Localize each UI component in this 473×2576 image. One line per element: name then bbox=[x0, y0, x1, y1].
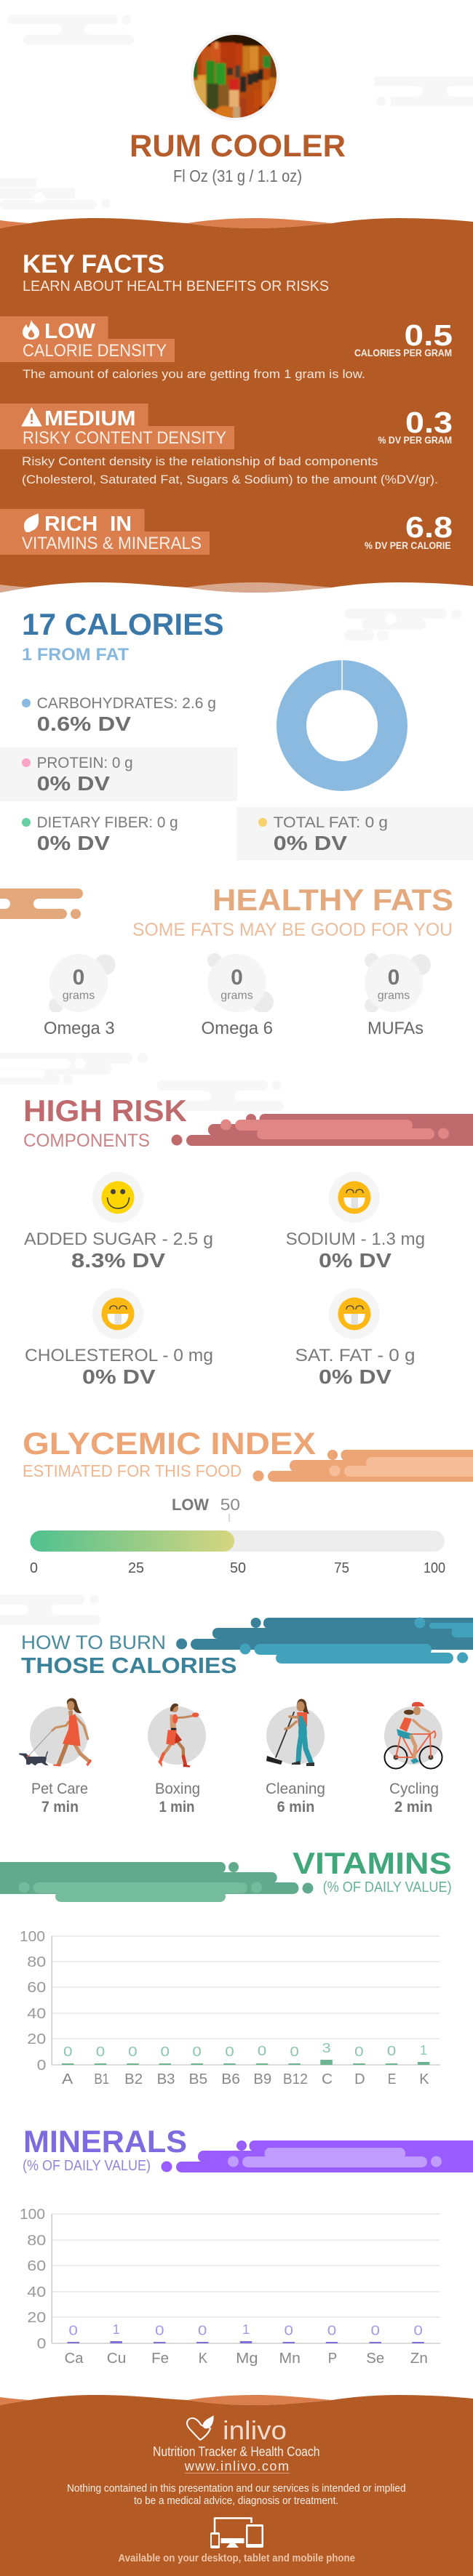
unit: CALORIES PER GRAM bbox=[354, 348, 452, 358]
calories heading: 17 CALORIES bbox=[22, 607, 224, 641]
panel: healthy fats bbox=[0, 883, 453, 1038]
activity: cycling: 2 min bbox=[394, 1799, 432, 1815]
item: saturated fat: 0% DV bbox=[319, 1365, 391, 1388]
unit: % DV PER GRAM bbox=[378, 435, 452, 446]
bar chart: minerals: Ca bbox=[65, 2351, 84, 2367]
icon: person sweeping bbox=[266, 1699, 314, 1766]
item: cholesterol: CHOLESTEROL - 0 mg bbox=[25, 1346, 213, 1365]
panel: calories and macronutrients bbox=[0, 607, 473, 860]
bar chart: vitamins: 0 bbox=[63, 2044, 73, 2059]
activity: cleaning: 6 min bbox=[277, 1799, 314, 1815]
decorative blob bbox=[253, 1450, 473, 1482]
row: carbohydrates: 0.6% DV bbox=[37, 713, 131, 735]
background cloud: burn calories bbox=[0, 1594, 109, 1625]
vitamins and minerals label: VITAMINS & MINERALS bbox=[22, 534, 202, 553]
donut chart bbox=[291, 659, 393, 777]
icon: warning triangle bbox=[22, 408, 41, 426]
fat: omega 3: 0 bbox=[73, 966, 84, 990]
row: protein bbox=[0, 747, 237, 801]
activity: cycling: Cycling bbox=[389, 1781, 439, 1797]
row: carbohydrates bbox=[22, 695, 216, 735]
fat: omega 3 bbox=[44, 954, 115, 1038]
activity: pet care: 7 min bbox=[41, 1799, 79, 1815]
icon: flame bbox=[23, 320, 39, 340]
fat: mufas bbox=[365, 953, 431, 1038]
bar chart: vitamins: 40 bbox=[27, 2006, 46, 2022]
gauge scale: 0 bbox=[30, 1560, 38, 1576]
logo: inlivo: inlivo bbox=[223, 2415, 287, 2445]
subheading: (% OF DAILY VALUE) bbox=[323, 1879, 452, 1895]
website link: www.inlivo.com bbox=[184, 2459, 289, 2473]
bar chart: vitamins: 0 bbox=[290, 2044, 299, 2059]
gauge scale: 100 bbox=[424, 1560, 445, 1576]
activity: pet care: Pet Care bbox=[31, 1781, 88, 1797]
panel: glycemic index bbox=[23, 1427, 473, 1576]
icon: cyclist bbox=[384, 1702, 442, 1768]
subheading: SOME FATS MAY BE GOOD FOR YOU bbox=[132, 920, 453, 940]
value: 0.3 bbox=[405, 406, 453, 439]
disclaimer line one: Nothing contained in this presentation and our services is intended or implied bbox=[67, 2482, 406, 2495]
bar chart: vitamins: 0 bbox=[128, 2044, 138, 2059]
bar chart: vitamins: 80 bbox=[27, 1954, 46, 1970]
bar chart: minerals: Se bbox=[366, 2351, 384, 2367]
fat: mufas: 0 bbox=[388, 966, 400, 990]
description: The amount of calories you are getting from 1 gram is low. bbox=[23, 367, 365, 381]
decorative blob bbox=[0, 888, 92, 919]
bar chart: vitamins bbox=[20, 1929, 440, 2087]
logo: inlivo bbox=[187, 2415, 287, 2445]
row: dietary fiber: 0% DV bbox=[37, 832, 110, 854]
icon: grinning face bbox=[102, 1297, 134, 1331]
bar chart: vitamins: B6 bbox=[221, 2071, 240, 2087]
panel: footer bbox=[0, 2395, 473, 2576]
decorative blob bbox=[0, 1862, 313, 1902]
description: Risky Content density is the relationship of bad components bbox=[22, 454, 378, 468]
rich in label: RICH IN bbox=[44, 513, 132, 536]
icon: grinning face bbox=[338, 1297, 371, 1331]
value: 6.8 bbox=[405, 510, 453, 544]
decorative blob bbox=[176, 1617, 473, 1664]
key facts subheading: LEARN ABOUT HEALTH BENEFITS OR RISKS bbox=[23, 278, 329, 294]
bar chart: minerals: P bbox=[328, 2351, 337, 2367]
bar chart: vitamins: 0 bbox=[354, 2044, 364, 2059]
item: sodium: SODIUM - 1.3 mg bbox=[286, 1229, 425, 1249]
heading: VITAMINS bbox=[293, 1846, 452, 1880]
panel: key facts bbox=[0, 215, 473, 601]
panel: minerals bbox=[20, 2124, 473, 2367]
disclaimer line two: to be a medical advice, diagnosis or treatment. bbox=[134, 2495, 338, 2507]
background clouds: header bbox=[0, 15, 473, 209]
risky content density label: RISKY CONTENT DENSITY bbox=[23, 428, 226, 448]
bar chart: minerals: 40 bbox=[27, 2284, 46, 2300]
icon: grinning face bbox=[338, 1181, 371, 1214]
bar chart: vitamins: E bbox=[388, 2071, 396, 2087]
bar chart: minerals: 1 bbox=[242, 2322, 250, 2337]
bottom wave bbox=[0, 582, 473, 601]
activity: boxing bbox=[148, 1704, 206, 1815]
food photo: rum bottles bbox=[191, 32, 279, 121]
panel: vitamins bbox=[0, 1846, 452, 2087]
row: total fat bbox=[236, 807, 473, 860]
fat: mufas: MUFAs bbox=[367, 1019, 424, 1038]
fact: rich in vitamins and minerals bbox=[0, 509, 453, 555]
item: saturated fat bbox=[295, 1288, 415, 1388]
bar chart: minerals: 20 bbox=[27, 2310, 46, 2326]
bar chart: minerals: Mg bbox=[236, 2351, 258, 2367]
bar chart: vitamins: K bbox=[419, 2071, 429, 2087]
bar chart: vitamins: A bbox=[62, 2071, 73, 2087]
activity: cleaning: Cleaning bbox=[266, 1781, 325, 1797]
bar chart: minerals bbox=[20, 2207, 440, 2367]
item: sodium: 0% DV bbox=[319, 1249, 391, 1272]
bar chart: vitamins: 0 bbox=[37, 2058, 46, 2074]
heading: HIGH RISK bbox=[23, 1094, 187, 1128]
subheading: COMPONENTS bbox=[23, 1131, 150, 1151]
bar chart: vitamins: 3 bbox=[322, 2040, 331, 2055]
bar chart: vitamins: 0 bbox=[387, 2043, 396, 2058]
bar chart: minerals: Zn bbox=[410, 2351, 428, 2367]
bar chart: vitamins: D bbox=[354, 2071, 365, 2087]
activity: pet care bbox=[19, 1698, 92, 1815]
bar chart: vitamins: 0 bbox=[192, 2044, 202, 2059]
activity: boxing: 1 min bbox=[159, 1799, 195, 1815]
subheading: (% OF DAILY VALUE) bbox=[23, 2158, 151, 2174]
row: dietary fiber: DIETARY FIBER: 0 g bbox=[37, 814, 178, 831]
gauge scale: 50 bbox=[230, 1560, 246, 1576]
gauge scale: 25 bbox=[128, 1560, 144, 1576]
row: carbohydrates: CARBOHYDRATES: 2.6 g bbox=[37, 695, 216, 712]
bar chart: vitamins: B3 bbox=[157, 2071, 175, 2087]
bar chart: minerals: Cu bbox=[107, 2351, 126, 2367]
row: dietary fiber bbox=[22, 814, 178, 854]
bar chart: minerals: Mn bbox=[279, 2351, 301, 2367]
row: total fat: 0% DV bbox=[274, 832, 347, 854]
unit: % DV PER CALORIE bbox=[365, 540, 451, 551]
fat: omega 6: 0 bbox=[231, 966, 243, 990]
gauge scale bbox=[30, 1560, 445, 1576]
bar chart: vitamins: B9 bbox=[253, 2071, 271, 2087]
bar chart: vitamins: 20 bbox=[27, 2031, 46, 2047]
activity: cleaning bbox=[266, 1699, 325, 1815]
bar chart: vitamins: B12 bbox=[283, 2071, 308, 2087]
calorie density label: CALORIE DENSITY bbox=[23, 341, 167, 361]
heading line two: THOSE CALORIES bbox=[21, 1653, 237, 1678]
fat: mufas: grams bbox=[378, 990, 410, 1002]
bar chart: minerals: 0 bbox=[327, 2322, 336, 2338]
item: added sugar: 8.3% DV bbox=[71, 1249, 165, 1272]
bar chart: minerals: 0 bbox=[68, 2322, 78, 2338]
gauge label bbox=[172, 1496, 240, 1522]
bar chart: vitamins: 0 bbox=[225, 2044, 234, 2059]
bar chart: vitamins: 0 bbox=[258, 2043, 266, 2058]
fat: omega 6: Omega 6 bbox=[201, 1019, 273, 1038]
gauge scale: 75 bbox=[334, 1560, 349, 1576]
tagline: Nutrition Tracker & Health Coach bbox=[153, 2444, 320, 2459]
calories from fat: 1 FROM FAT bbox=[22, 645, 129, 665]
description line two: (Cholesterol, Saturated Fat, Sugars & Sodium) to the amount (%DV/gr). bbox=[22, 473, 438, 486]
heading: MINERALS bbox=[23, 2124, 187, 2159]
bar chart: minerals: Fe bbox=[151, 2351, 169, 2367]
icon: boxer bbox=[158, 1704, 199, 1768]
availability note: Available on your desktop, tablet and mobile phone bbox=[118, 2552, 355, 2564]
heading line one: HOW TO BURN bbox=[21, 1632, 166, 1653]
activity: cycling bbox=[384, 1702, 442, 1815]
item: sodium bbox=[286, 1172, 425, 1272]
key facts heading: KEY FACTS bbox=[23, 250, 164, 278]
subheading: ESTIMATED FOR THIS FOOD bbox=[23, 1461, 242, 1480]
bar chart: vitamins: B2 bbox=[124, 2071, 143, 2087]
background cloud: calories bbox=[344, 609, 461, 641]
bar chart: minerals: 100 bbox=[20, 2207, 45, 2223]
bar chart: minerals: 0 bbox=[37, 2336, 46, 2352]
row: protein: 0% DV bbox=[37, 772, 110, 795]
heading: GLYCEMIC INDEX bbox=[23, 1427, 316, 1461]
gauge label: LOW bbox=[172, 1496, 209, 1514]
low label: LOW bbox=[44, 320, 96, 343]
item: added sugar: ADDED SUGAR - 2.5 g bbox=[24, 1229, 213, 1249]
bar chart: vitamins: 1 bbox=[420, 2042, 427, 2058]
background clouds: high risk bbox=[0, 1053, 288, 1111]
fat: omega 6 bbox=[201, 953, 274, 1038]
decorative blob bbox=[162, 2140, 473, 2172]
bar chart: vitamins: 0 bbox=[96, 2044, 105, 2059]
icon: woman walking dog bbox=[19, 1698, 92, 1766]
panel: how to burn those calories bbox=[19, 1617, 473, 1815]
bar chart: vitamins: C bbox=[322, 2071, 333, 2087]
fact: low calorie density bbox=[0, 316, 453, 381]
bar chart: minerals: 0 bbox=[198, 2322, 207, 2338]
gauge bar bbox=[31, 1530, 445, 1552]
serving size: Fl Oz (31 g / 1.1 oz) bbox=[173, 166, 302, 185]
bar chart: minerals: 80 bbox=[27, 2233, 46, 2249]
row: total fat: TOTAL FAT: 0 g bbox=[274, 814, 388, 831]
activity: boxing: Boxing bbox=[155, 1781, 200, 1797]
bar chart: vitamins: 0 bbox=[161, 2044, 170, 2059]
medium label: MEDIUM bbox=[44, 407, 136, 430]
fact: medium risky content density bbox=[0, 404, 453, 486]
decorative blob bbox=[172, 1114, 473, 1146]
item: cholesterol: 0% DV bbox=[82, 1365, 156, 1388]
fat: omega 6: grams bbox=[220, 990, 253, 1002]
fat: omega 3: grams bbox=[63, 990, 95, 1002]
bar chart: vitamins: B1 bbox=[94, 2071, 109, 2087]
item: cholesterol bbox=[25, 1288, 213, 1388]
item: added sugar bbox=[24, 1172, 213, 1272]
bar chart: minerals: 0 bbox=[413, 2322, 423, 2338]
bar chart: vitamins: B5 bbox=[189, 2071, 207, 2087]
bar chart: vitamins: 60 bbox=[27, 1980, 46, 1996]
gauge label: 50 bbox=[220, 1496, 240, 1514]
icon: leaf bbox=[24, 513, 39, 532]
item: saturated fat: SAT. FAT - 0 g bbox=[295, 1346, 415, 1365]
footer wave bbox=[0, 2395, 473, 2576]
top wave bbox=[0, 215, 473, 233]
bar chart: vitamins: 100 bbox=[20, 1929, 45, 1945]
bar chart: minerals: 1 bbox=[112, 2322, 120, 2337]
bar chart: minerals: 60 bbox=[27, 2258, 46, 2274]
heading: HEALTHY FATS bbox=[212, 883, 453, 917]
value: 0.5 bbox=[405, 318, 453, 352]
fat: omega 3: Omega 3 bbox=[44, 1019, 115, 1038]
title: RUM COOLER bbox=[130, 129, 346, 164]
icon: devices bbox=[210, 2519, 263, 2548]
bar chart: minerals: 0 bbox=[155, 2322, 164, 2338]
bar chart: minerals: 0 bbox=[285, 2322, 293, 2338]
panel: high risk components bbox=[23, 1094, 473, 1388]
bar chart: minerals: K bbox=[199, 2351, 208, 2367]
row: protein: PROTEIN: 0 g bbox=[37, 755, 133, 771]
icon: smiley bbox=[102, 1181, 134, 1214]
bar chart: minerals: 0 bbox=[371, 2322, 380, 2338]
